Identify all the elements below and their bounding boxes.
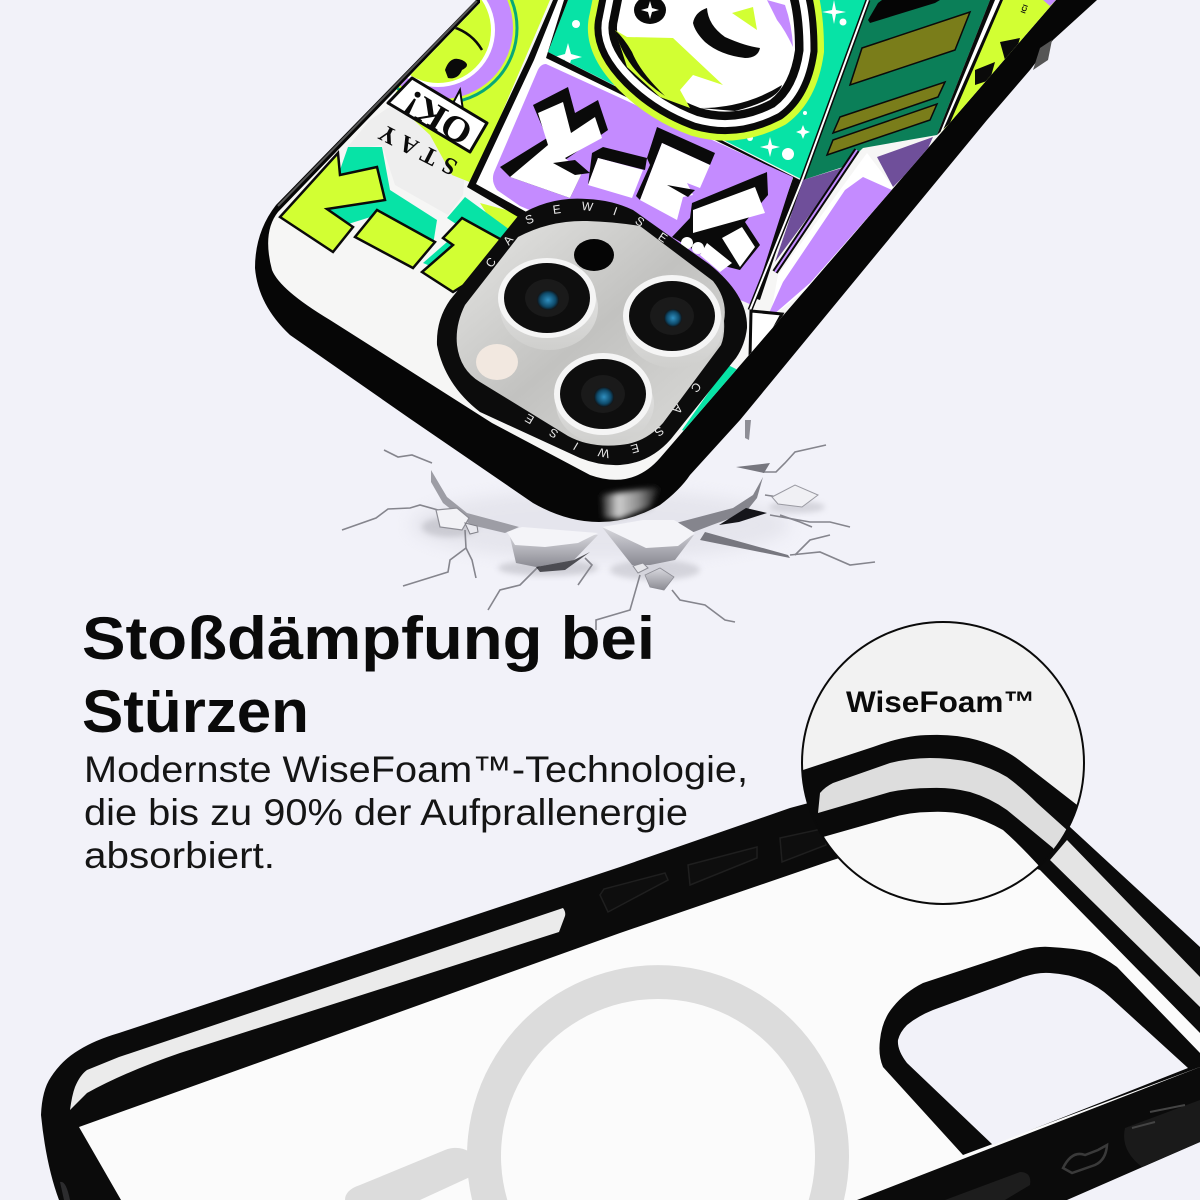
panel frame bbox=[467, 0, 800, 300]
small rock left bbox=[436, 508, 469, 530]
lens three bbox=[554, 353, 654, 444]
black frame bbox=[41, 765, 1200, 1200]
face mouth bbox=[693, 8, 760, 58]
cracked ground illustration bbox=[342, 420, 875, 630]
open clear case, bottom bbox=[41, 765, 1200, 1200]
CASEWISE ring lettering bottom: CASEWISE bbox=[524, 383, 700, 458]
camera cut-out bbox=[879, 947, 1200, 1155]
camera plateau bbox=[457, 221, 725, 446]
body text: die bis zu 90% der Aufprallenergie bbox=[84, 792, 688, 833]
heading bbox=[82, 605, 655, 745]
face blob bbox=[615, 0, 795, 112]
foam strip left bbox=[70, 908, 565, 1110]
case bumper bbox=[255, 0, 1097, 522]
lower left port bbox=[60, 1182, 70, 1200]
face lime patch bbox=[615, 30, 723, 108]
rock chunk 1 bbox=[509, 533, 598, 567]
callout label: WiseFoam™ bbox=[846, 686, 1035, 719]
phone with printed case, top bbox=[255, 0, 1097, 522]
cracks bbox=[342, 445, 875, 630]
magnified foam strip bbox=[818, 758, 1066, 849]
camera island bbox=[436, 198, 748, 466]
dark green card bbox=[803, 0, 990, 180]
left plate edge bbox=[431, 470, 519, 533]
MagSafe pill bbox=[345, 1148, 476, 1200]
small rock right bbox=[772, 485, 818, 507]
dividing line bbox=[750, 0, 868, 310]
lens one bbox=[498, 258, 598, 350]
bumper gloss bbox=[600, 487, 660, 519]
purple lower card bbox=[682, 137, 933, 433]
flash bbox=[476, 344, 518, 380]
face triangle bbox=[732, 7, 757, 30]
side buttons bbox=[600, 828, 826, 912]
heading: Stürzen bbox=[82, 678, 309, 745]
foam strip right bbox=[1050, 840, 1200, 1007]
clear back panel bbox=[79, 830, 1200, 1200]
right plate edge bbox=[676, 477, 763, 533]
purple panel lettering bbox=[500, 87, 768, 272]
heading: Stoßdämpfung bei bbox=[82, 605, 655, 672]
magnifier callout: WiseFoam bbox=[801, 621, 1085, 905]
face hair bbox=[700, 85, 782, 111]
bumper left edge highlight bbox=[278, 1, 477, 206]
lime area with smiley bbox=[396, 0, 550, 228]
CASEWISE ring lettering top: CASEWISE bbox=[486, 202, 668, 266]
magnified rim bbox=[803, 734, 1077, 866]
mic hole bbox=[574, 239, 614, 271]
speech bubble OK: OK! bbox=[397, 83, 479, 154]
lower edge band details bbox=[1124, 1100, 1200, 1167]
green star panel bbox=[548, 0, 868, 180]
rock chunk 2 bbox=[602, 527, 694, 565]
face purple bbox=[767, 0, 793, 47]
STAY lettering: STAY bbox=[375, 119, 462, 180]
sticker grey patch bbox=[345, 100, 465, 215]
magnified interior bbox=[824, 812, 1038, 903]
number shapes bbox=[280, 147, 520, 292]
small ICI lettering: ICI bbox=[1020, 4, 1030, 15]
face eye bbox=[634, 0, 666, 24]
face crescent bbox=[615, 30, 665, 96]
body text: Modernste WiseFoam™-Technologie, bbox=[84, 749, 748, 790]
lens two bbox=[623, 275, 723, 368]
body text: absorbiert. bbox=[84, 835, 275, 876]
art right of the card bbox=[937, 0, 1056, 135]
body text bbox=[84, 749, 748, 876]
MagSafe ring bbox=[467, 965, 849, 1200]
printed artwork bbox=[250, 0, 1100, 490]
bumper side button highlight bbox=[1033, 40, 1052, 70]
lower ports bbox=[1063, 1145, 1107, 1173]
small rocks under chunk 2 bbox=[633, 563, 648, 573]
